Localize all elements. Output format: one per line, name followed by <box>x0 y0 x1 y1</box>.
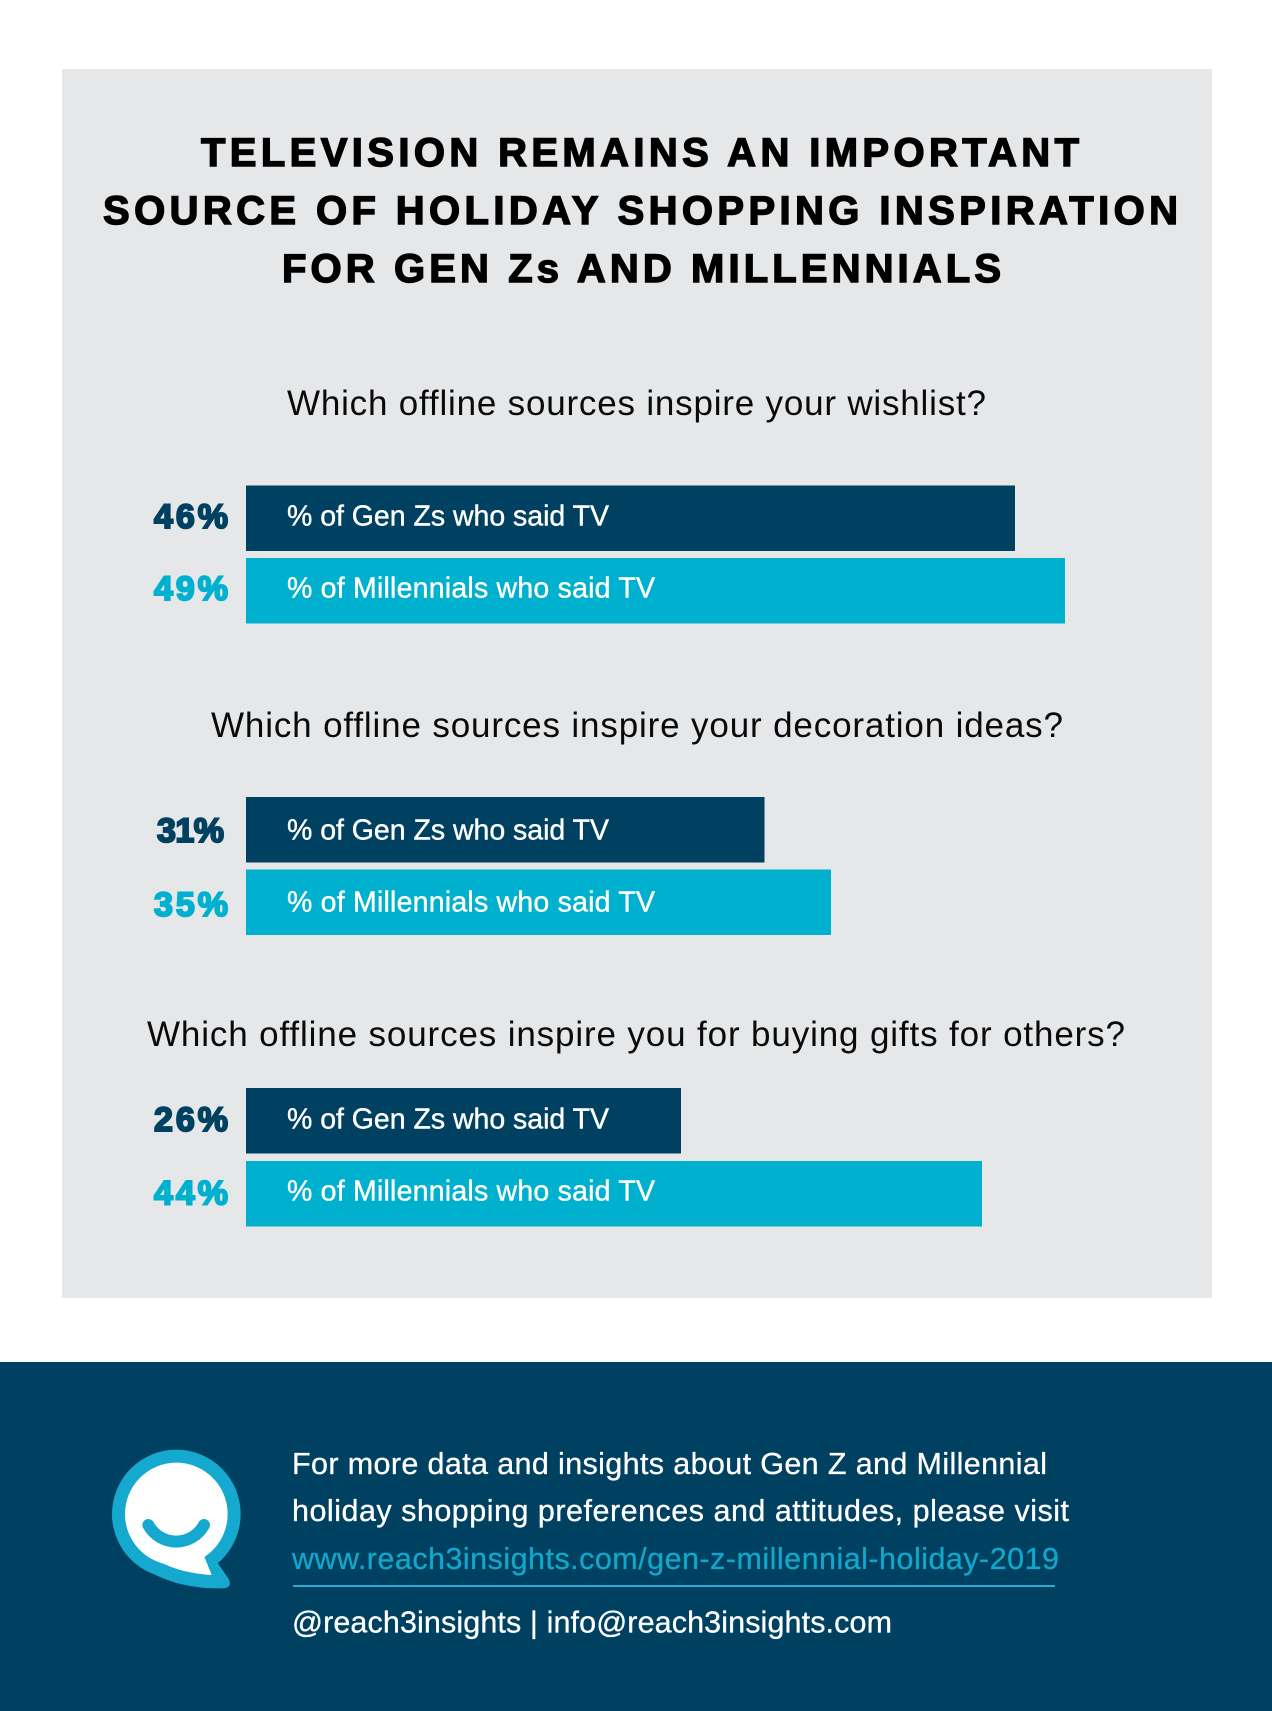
panel: survey results <box>62 69 1212 1298</box>
bar: Millennial gifts: % of Millennials who said TV <box>287 1176 655 1208</box>
bar chart: decoration ideas <box>154 797 831 935</box>
title: FOR GEN Zs AND MILLENNIALS <box>282 247 1001 291</box>
bar: Gen Z decoration <box>246 797 764 862</box>
bar chart: gifts for others <box>154 1088 982 1226</box>
bar chart: wishlist <box>154 486 1065 624</box>
bar: Millennial wishlist <box>246 558 1065 624</box>
value: Gen Z decoration 31%: 31% <box>157 812 224 850</box>
bar: Gen Z wishlist: % of Gen Zs who said TV <box>287 500 609 532</box>
bar: Gen Z gifts <box>246 1088 681 1154</box>
question: decoration ideas: Which offline sources inspire your decoration ideas? <box>211 706 1063 745</box>
bar: Gen Z decoration: % of Gen Zs who said TV <box>287 814 609 846</box>
value: Millennial decoration 35%: 35% <box>154 886 228 924</box>
value: Millennial gifts 44%: 44% <box>154 1174 228 1212</box>
footer text <box>291 1447 1070 1640</box>
bar: Millennial decoration <box>246 870 831 935</box>
link: www.reach3insights.com/gen-z-millennial-holiday-2019 <box>291 1542 1059 1576</box>
footer text: holiday shopping preferences and attitudes, please visit <box>292 1494 1070 1528</box>
bar: Millennial gifts <box>246 1161 982 1226</box>
question: gifts for others: Which offline sources inspire you for buying gifts for others? <box>147 1015 1125 1054</box>
title: TELEVISION REMAINS AN IMPORTANT <box>201 131 1079 175</box>
title: SOURCE OF HOLIDAY SHOPPING INSPIRATION <box>103 189 1178 233</box>
icon: smiling speech bubble logo <box>112 1450 241 1588</box>
contact details: @reach3insights | info@reach3insights.com <box>292 1606 892 1640</box>
bar: Millennial decoration: % of Millennials who said TV <box>287 886 655 918</box>
value: Millennial wishlist 49%: 49% <box>154 570 228 608</box>
footer band <box>0 1362 1272 1711</box>
question: wishlist: Which offline sources inspire your wishlist? <box>287 384 986 423</box>
bar: Millennial wishlist: % of Millennials who said TV <box>287 572 655 604</box>
link underline <box>293 1585 1055 1587</box>
value: Gen Z gifts 26%: 26% <box>154 1101 228 1139</box>
footer text: For more data and insights about Gen Z and Millennial <box>292 1447 1047 1481</box>
bar: Gen Z wishlist <box>246 486 1015 551</box>
title <box>103 131 1178 291</box>
value: Gen Z wishlist 46%: 46% <box>154 498 228 536</box>
bar: Gen Z gifts: % of Gen Zs who said TV <box>287 1104 609 1136</box>
